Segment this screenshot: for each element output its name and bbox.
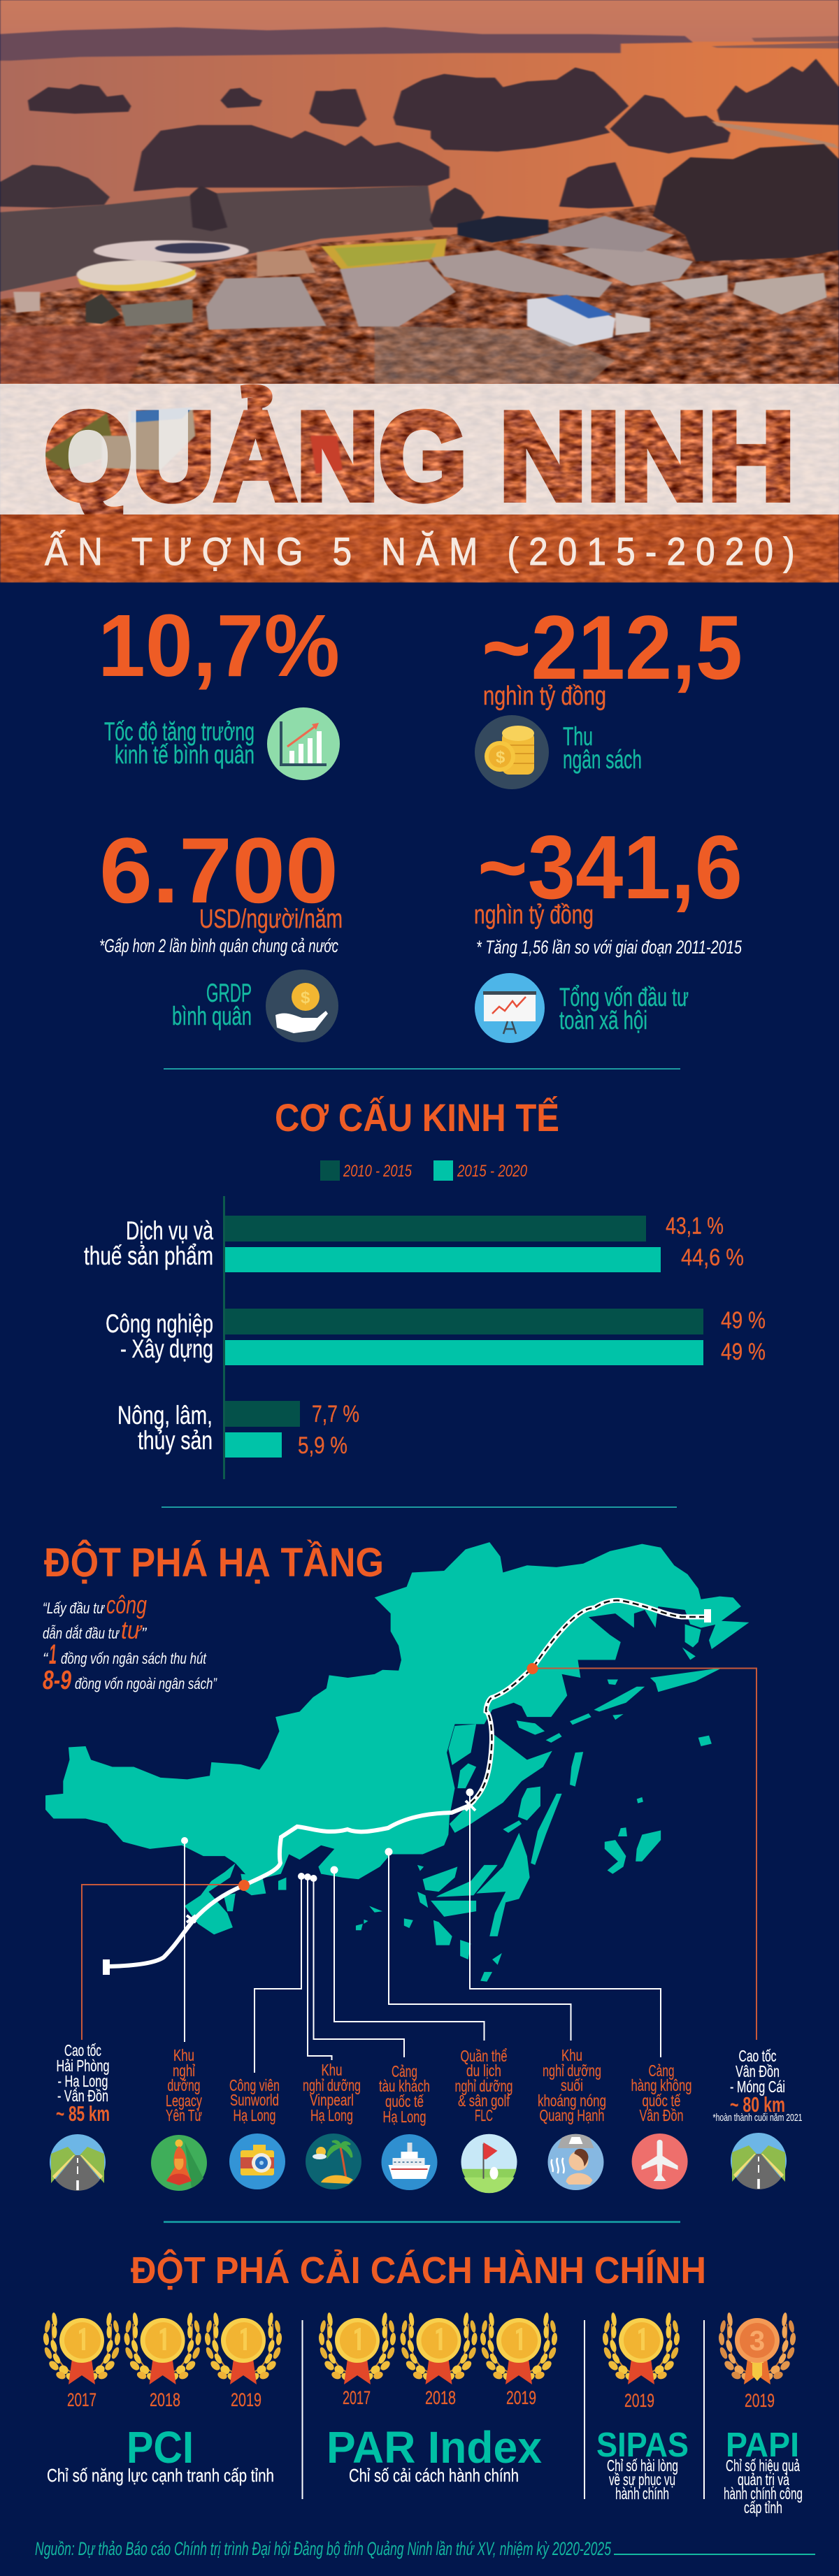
label: FLC: Quần thể: [460, 2047, 508, 2065]
icon: palm island: [306, 2134, 361, 2189]
bars: agriculture: 7,7 %: [312, 1401, 359, 1427]
heading: infrastructure breakthrough: ĐỘT PHÁ HẠ TẦNG: [44, 1540, 384, 1585]
quote: ”: [141, 1625, 148, 1642]
bars: agriculture: 5,9 %: [298, 1432, 347, 1459]
label: Sunworld: [229, 2076, 280, 2124]
quote: tư: [121, 1616, 143, 1644]
label: Ha Long cruise port: tàu khách: [379, 2077, 430, 2095]
icon: road: [50, 2134, 106, 2191]
legend: [320, 1160, 528, 1181]
stat: economic growth: Tốc độ tăng trưởng: [104, 717, 254, 746]
bars: services: [84, 1213, 744, 1272]
label: Ha Long cruise port: [379, 2062, 430, 2126]
panel: PAPI: cấp tỉnh: [744, 2498, 782, 2517]
legend: 2010 - 2015: [343, 1162, 412, 1181]
stat: economic growth: kinh tế bình quân: [115, 740, 254, 769]
label: Quang Hanh: Khu: [561, 2046, 582, 2064]
panel: PCI: 2019: [231, 2389, 261, 2410]
label: Vinpearl: Vinpearl: [310, 2091, 354, 2109]
icon: bronze medal: 3: [750, 2326, 765, 2356]
quote: [43, 1590, 217, 1695]
icon: coins: [475, 715, 549, 789]
bars: services: 43,1 %: [666, 1213, 724, 1239]
panel: PAR Index: [318, 2312, 558, 2486]
panel: SIPAS: Chỉ số hài lòng: [607, 2456, 678, 2475]
title band: QUẢNG NINH knocked out of translucent white: [0, 384, 839, 515]
quote: đồng vốn ngoài ngân sách”: [75, 1675, 217, 1692]
panel: SIPAS: 2019: [624, 2390, 654, 2411]
label: Sunworld: Sunworld: [230, 2091, 279, 2109]
bars: services: thuế sản phẩm: [84, 1242, 213, 1270]
panel: SIPAS: về sự phục vụ: [609, 2470, 675, 2489]
label: Sunworld: Công viên: [229, 2076, 280, 2094]
panel: PAPI: [718, 2312, 803, 2517]
panel: PAR Index: PAR Index: [327, 2422, 542, 2473]
label: Hai Phong expressway: [56, 2041, 110, 2126]
stat: total investment: ~341,6: [478, 817, 743, 918]
quote: “: [43, 1650, 49, 1667]
icon: hot spring: [548, 2134, 604, 2190]
label: Mong Cai expressway: - Móng Cái: [730, 2078, 785, 2096]
label: Sunworld: Hạ Long: [234, 2106, 275, 2124]
legend: 2015 - 2020: [457, 1162, 528, 1181]
panel: PCI: 2018: [150, 2389, 180, 2410]
icon: airplane: [632, 2134, 688, 2189]
bars: industry: - Xây dựng: [120, 1334, 213, 1363]
label: Mong Cai expressway: ~ 80 km: [730, 2092, 785, 2117]
stat: GRDP per capita: 6.700: [99, 819, 338, 923]
label: Hai Phong expressway: ~ 85 km: [56, 2101, 110, 2126]
stat: total investment: nghìn tỷ đồng: [474, 900, 594, 930]
panel: PAR Index: 2018: [425, 2387, 456, 2408]
stat: budget revenue: [475, 596, 743, 789]
icon: camera: [229, 2134, 285, 2189]
label: Legacy Yen Tu: Yên Tử: [166, 2106, 202, 2124]
label: FLC: FLC: [475, 2106, 493, 2124]
label: Hai Phong expressway: Cao tốc: [64, 2041, 101, 2059]
label: Legacy Yen Tu: [166, 2046, 202, 2124]
hero: Ha Long bay and city illustration: [0, 0, 839, 582]
stat: GRDP per capita: USD/người/năm: [199, 905, 343, 934]
label: Van Don airport: [631, 2061, 692, 2124]
quote: dẫn dắt đầu tư: [43, 1625, 120, 1642]
icon: golf flag: [461, 2134, 517, 2193]
heading: administrative reform: ĐỘT PHÁ CẢI CÁCH HÀNH CHÍNH: [131, 2249, 706, 2291]
map of Quang Ninh: [45, 1542, 749, 1982]
stat: budget revenue: ngân sách: [563, 745, 642, 774]
stat: total investment: Tổng vốn đầu tư: [559, 983, 689, 1012]
stat: GRDP per capita: *Gấp hơn 2 lần bình quân chung cả nước: [99, 935, 338, 956]
panel: SIPAS: [596, 2312, 689, 2503]
quote: đồng vốn ngân sách thu hút: [61, 1650, 207, 1667]
road: Van Don - Mong Cai expressway (dashed): [471, 1600, 711, 1804]
bars: agriculture: thủy sản: [138, 1426, 213, 1455]
panel: PAPI: quản trị và: [738, 2470, 789, 2489]
bar chart: economic structure: [84, 1196, 766, 1479]
stat: GRDP per capita: bình quân: [172, 1002, 252, 1030]
label: Hai Phong expressway: - Hạ Long: [57, 2072, 108, 2090]
label: Van Don airport: Cảng: [649, 2061, 674, 2080]
icon: cruise ship: [382, 2134, 438, 2190]
label: Mong Cai expressway: [713, 2047, 803, 2124]
icon: bronze medal: [718, 2312, 796, 2384]
label: Mong Cai expressway: *hoàn thành cuối năm 2021: [713, 2112, 803, 2124]
panel: PAR Index: Chỉ số cải cách hành chính: [349, 2465, 519, 2486]
bars: industry: [106, 1307, 766, 1365]
panel: PCI: [43, 2312, 282, 2486]
bars: industry: 49 %: [721, 1307, 766, 1334]
label: FLC: du lịch: [466, 2061, 501, 2080]
stat: budget revenue: nghìn tỷ đồng: [483, 682, 606, 711]
label: Van Don airport: quốc tế: [642, 2092, 681, 2110]
icon: hand holding coin: $: [301, 988, 310, 1007]
panel: PCI: 2017: [67, 2389, 96, 2410]
label: Quang Hanh: nghỉ dưỡng: [543, 2061, 601, 2080]
label: Legacy Yen Tu: Legacy: [166, 2092, 202, 2110]
label: Legacy Yen Tu: nghỉ: [173, 2061, 195, 2080]
label: Van Don airport: Vân Đồn: [639, 2106, 684, 2124]
panel: PAR Index: 2019: [506, 2387, 536, 2408]
subtitle: ẤN TƯỢNG 5 NĂM (2015-2020): [45, 529, 795, 574]
bars: industry: Công nghiệp: [106, 1309, 213, 1338]
bars: services: Dịch vụ và: [126, 1216, 213, 1245]
label: Legacy Yen Tu: dưỡng: [168, 2076, 200, 2094]
label: Van Don airport: hàng không: [631, 2076, 692, 2094]
stat: GRDP per capita: [99, 819, 343, 1042]
icon: coins: $: [496, 748, 505, 767]
label: Mong Cai expressway: Cao tốc: [738, 2047, 776, 2065]
label: Legacy Yen Tu: Khu: [173, 2046, 194, 2064]
quote: công: [106, 1590, 147, 1619]
icon: presentation board: [475, 973, 545, 1043]
stat: total investment: * Tăng 1,56 lần so với giai đoạn 2011-2015: [476, 937, 743, 958]
stat: total investment: toàn xã hội: [559, 1006, 647, 1035]
panel: PCI: Chỉ số năng lực cạnh tranh cấp tỉnh: [47, 2465, 274, 2486]
label: Hai Phong expressway: Hải Phòng: [56, 2057, 109, 2075]
stat: economic growth: 10,7%: [98, 596, 340, 695]
label: Vinpearl: [303, 2061, 361, 2124]
label: Mong Cai expressway: Vân Đồn: [736, 2062, 780, 2080]
icon: meditating monk: [151, 2135, 207, 2191]
icon: growth chart: [267, 707, 340, 780]
label: Quang Hanh: Quang Hạnh: [540, 2106, 604, 2124]
road: Hai Phong - Ha Long - Van Don expressway: [103, 1801, 475, 1975]
label: Ha Long cruise port: Cảng: [392, 2062, 417, 2080]
stat: economic growth: [98, 596, 340, 780]
bars: agriculture: [117, 1401, 359, 1459]
leader lines: white location callouts: [181, 1788, 661, 2073]
panel: PAPI: Chỉ số hiệu quả: [726, 2456, 800, 2475]
label: Quang Hanh: suối: [561, 2076, 583, 2094]
stat: total investment: [474, 817, 743, 1043]
stat: budget revenue: ~212,5: [482, 596, 743, 698]
stat: GRDP per capita: GRDP: [206, 979, 252, 1007]
icon: hand holding coin: [266, 970, 338, 1042]
icon: road: [731, 2133, 787, 2189]
label: Hai Phong expressway: - Vân Đồn: [57, 2087, 108, 2105]
panel: PAR Index: 2017: [343, 2387, 371, 2408]
panel: SIPAS: hành chính: [615, 2484, 669, 2503]
label: FLC: nghỉ dưỡng: [454, 2077, 513, 2095]
panel: PAPI: PAPI: [726, 2426, 799, 2464]
label: Quang Hanh: [538, 2046, 606, 2124]
panel: SIPAS: SIPAS: [596, 2426, 689, 2464]
quote: “Lấy đầu tư: [43, 1599, 106, 1617]
label: Vinpearl: nghỉ dưỡng: [303, 2076, 361, 2094]
heading: economic structure: CƠ CẤU KINH TẾ: [275, 1095, 559, 1139]
label: Ha Long cruise port: Hạ Long: [383, 2108, 426, 2126]
label: FLC: & sân golf: [458, 2092, 510, 2110]
quote: 1: [49, 1639, 57, 1670]
panel: PAPI: 2019: [745, 2390, 775, 2411]
label: FLC: [454, 2047, 513, 2124]
panel: PAPI: hành chính công: [724, 2484, 803, 2503]
leader lines: orange expressway callouts: [82, 1663, 756, 2040]
bars: industry: 49 %: [721, 1339, 766, 1365]
label: Quang Hanh: khoáng nóng: [538, 2092, 606, 2110]
label: Ha Long cruise port: quốc tế: [385, 2092, 424, 2110]
stat: budget revenue: Thu: [563, 722, 593, 751]
quote: 8-9: [43, 1666, 71, 1695]
label: Vinpearl: Khu: [322, 2061, 343, 2079]
bars: services: 44,6 %: [681, 1244, 744, 1271]
label: Vinpearl: Hạ Long: [310, 2106, 353, 2124]
panel: PCI: PCI: [127, 2422, 194, 2473]
bars: agriculture: Nông, lâm,: [117, 1401, 213, 1430]
